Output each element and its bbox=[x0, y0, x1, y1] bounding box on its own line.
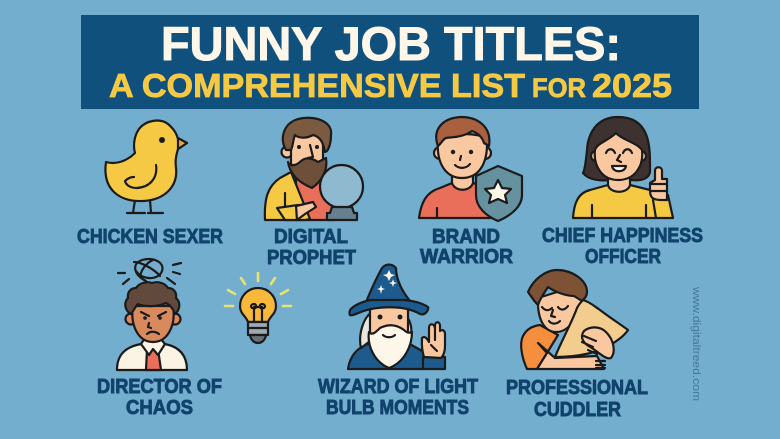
icon: brand warrior bbox=[419, 117, 522, 221]
label: wizard of light bulb moments bbox=[318, 376, 478, 419]
label: chief happiness officer: CHIEF HAPPINESS bbox=[542, 225, 703, 247]
icon: digital prophet bbox=[265, 118, 363, 220]
title banner bbox=[81, 15, 699, 109]
label: director of chaos bbox=[97, 376, 222, 419]
label: director of chaos: DIRECTOR OF bbox=[97, 376, 222, 398]
label: digital prophet: PROPHET bbox=[267, 247, 356, 269]
label: digital prophet bbox=[267, 226, 356, 269]
label: professional cuddler: CUDDLER bbox=[534, 399, 621, 421]
label: professional cuddler bbox=[506, 377, 648, 421]
label: professional cuddler: PROFESSIONAL bbox=[506, 377, 648, 399]
label: brand warrior: BRAND bbox=[432, 226, 500, 248]
label: wizard of light bulb moments: WIZARD OF LIGHT bbox=[318, 376, 478, 398]
icon: chief happiness officer bbox=[573, 117, 673, 218]
label: digital prophet: DIGITAL bbox=[274, 226, 348, 248]
label: wizard of light bulb moments: BULB MOMENTS bbox=[326, 397, 469, 419]
icon: chick bbox=[105, 121, 187, 213]
label: chief happiness officer bbox=[542, 225, 703, 268]
icon: director of chaos bbox=[117, 259, 187, 370]
title line 2: A COMPREHENSIVE LIST bbox=[109, 67, 525, 104]
label: chicken sexer: CHICKEN SEXER bbox=[77, 226, 223, 248]
label: brand warrior bbox=[420, 226, 514, 268]
icon: professional cuddler bbox=[521, 270, 628, 369]
icon: wizard bbox=[348, 265, 445, 369]
label: chief happiness officer: OFFICER bbox=[585, 246, 661, 268]
title line 2: FOR bbox=[532, 73, 586, 103]
title line 2: 2025 bbox=[592, 67, 672, 104]
watermark: website url: www.digitaltreed.com bbox=[690, 286, 702, 401]
title line 1: FUNNY JOB TITLES: bbox=[161, 17, 621, 70]
icon: light bulb bbox=[225, 273, 291, 343]
label: director of chaos: CHAOS bbox=[126, 397, 193, 419]
label: brand warrior: WARRIOR bbox=[420, 246, 514, 268]
